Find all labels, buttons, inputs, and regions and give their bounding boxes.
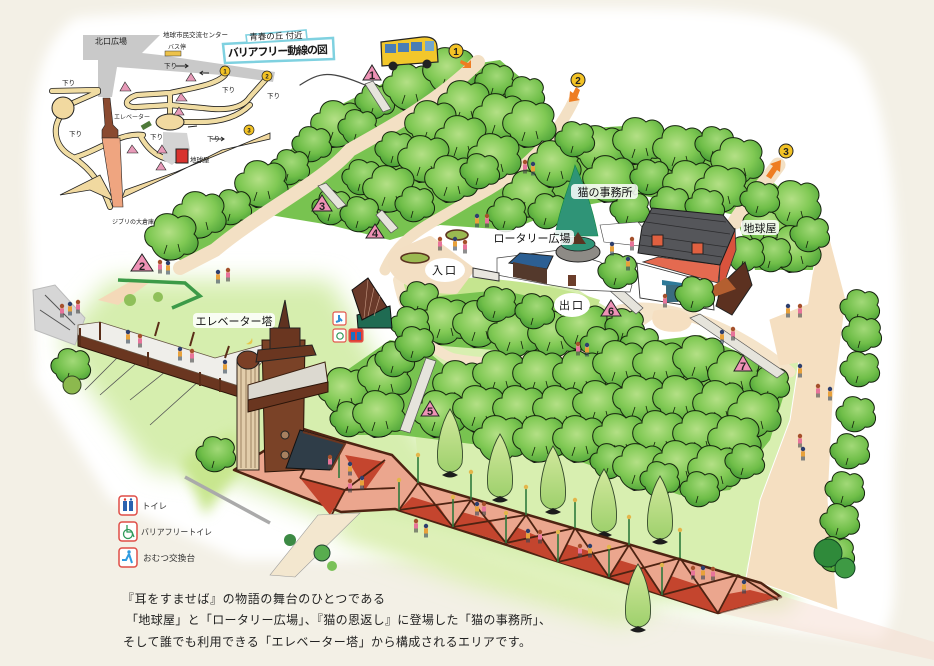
lower-left garden and steps <box>185 437 360 577</box>
forest underlay <box>160 60 815 495</box>
back forest north of main path <box>145 48 476 261</box>
inset route map: エレベーター <box>114 113 150 121</box>
inset route map: 下り <box>164 62 177 70</box>
right cream road <box>746 220 846 610</box>
left bridge approach <box>33 280 200 425</box>
inset route map: 3 <box>247 128 251 134</box>
area map labels: 出口 <box>559 299 585 312</box>
numbered pink triangles: 3 <box>319 201 325 213</box>
area map labels <box>193 184 779 328</box>
middle forest band <box>312 64 556 232</box>
forest paths <box>180 62 820 372</box>
inset route map <box>52 30 280 226</box>
building: rotary plaza <box>401 165 643 292</box>
description text: 「地球屋」と「ロータリー広場」、『猫の恩返し』に登場した「猫の事務所」、 <box>126 612 551 627</box>
building: Chikyuya <box>598 208 752 315</box>
visitor figures <box>60 160 832 594</box>
numbered pink triangles <box>131 65 752 418</box>
numbered pink triangles: 6 <box>608 306 614 318</box>
soft green ground <box>60 278 800 625</box>
lower forest <box>318 327 790 507</box>
poplar trees <box>438 409 672 544</box>
area map labels: エレベーター塔 <box>196 315 272 328</box>
numbered pink triangles: 4 <box>372 228 379 240</box>
inset route map: 1 <box>223 70 227 76</box>
inset route map: 下り <box>222 86 235 94</box>
inset route map: 下り <box>150 133 163 141</box>
legend: バリアフリートイレ <box>141 527 212 537</box>
area map labels: 猫の事務所 <box>578 185 632 199</box>
destination markers and arrows: 1 <box>453 47 459 58</box>
right-side tree column <box>814 290 882 578</box>
legend <box>119 496 212 567</box>
legend: おむつ交換台 <box>143 553 195 563</box>
destination markers and arrows: 2 <box>575 76 581 87</box>
inset route map: 下り <box>267 92 280 100</box>
inset route map: 北口広場 <box>95 36 127 46</box>
upper right forest <box>487 118 830 273</box>
description text: そして誰でも利用できる「エレベーター塔」から構成されるエリアです。 <box>123 634 531 649</box>
description text <box>122 591 551 649</box>
numbered pink triangles: 1 <box>369 70 375 82</box>
destination markers and arrows: 3 <box>783 147 789 158</box>
description text: 『耳をすませば』の物語の舞台のひとつである <box>122 591 385 606</box>
inset route map: 下り <box>207 135 220 143</box>
inset route map: 地球市民交流センター <box>163 30 228 39</box>
destination markers and arrows <box>449 44 793 179</box>
front poplar on walkway <box>626 564 650 632</box>
area map labels: 地球屋 <box>744 222 776 235</box>
inset title: 青春の丘 付近 <box>249 30 303 42</box>
inset route map: 2 <box>265 74 269 80</box>
area map labels: ロータリー広場 <box>494 232 570 245</box>
elevated bridge <box>78 322 262 398</box>
inset title <box>223 30 334 63</box>
inset route map: ジブリの大倉庫 <box>112 218 154 226</box>
red walkway <box>234 428 934 660</box>
elevator tower <box>237 300 345 472</box>
numbered pink triangles: 5 <box>427 406 433 418</box>
numbered pink triangles: 7 <box>740 361 746 373</box>
inset route map: 下り <box>62 79 75 87</box>
legend: トイレ <box>142 501 167 511</box>
area map labels: 入口 <box>432 265 458 277</box>
inset route map: 下り <box>69 130 82 138</box>
building: cat house <box>352 278 392 328</box>
inset route map: 地球屋 <box>190 155 210 164</box>
toilet icons on map <box>333 312 363 342</box>
central forest below plaza <box>390 282 660 362</box>
inset title: バリアフリー動線の図 <box>228 42 328 60</box>
inset route map: バス停 <box>168 43 186 51</box>
numbered pink triangles: 2 <box>139 261 145 273</box>
bus <box>381 37 438 70</box>
stairs <box>318 81 785 433</box>
